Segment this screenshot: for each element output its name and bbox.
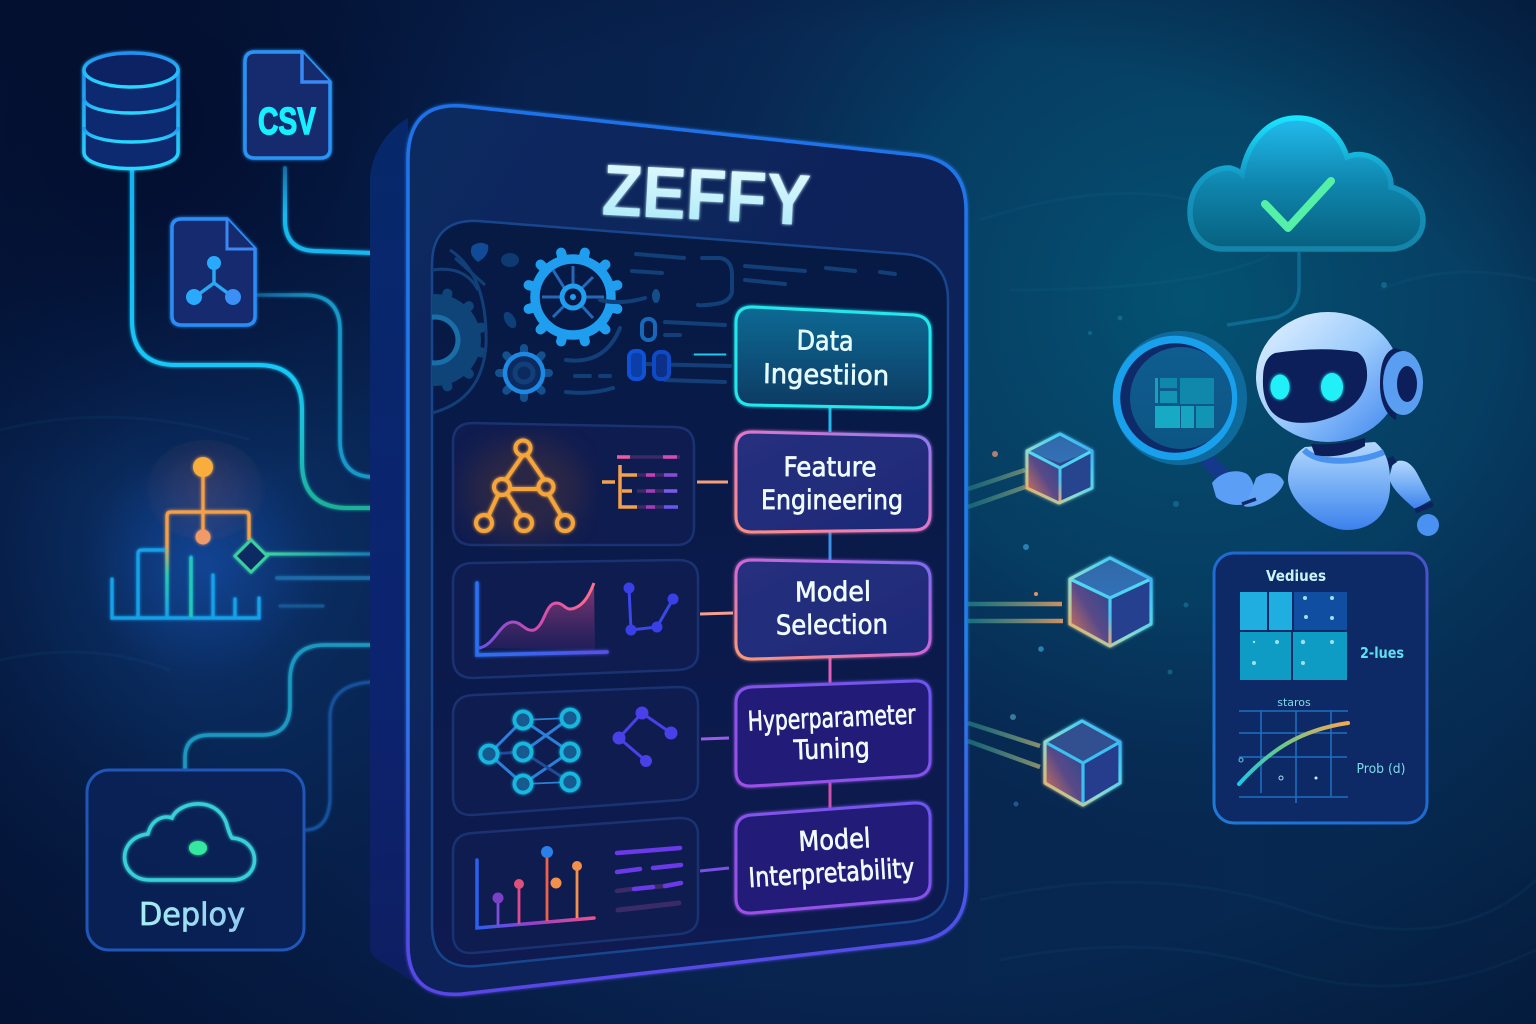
row: interpretability visuals [453,818,698,953]
icon: small gear [499,348,549,398]
area chart [479,583,595,650]
robot hand holding magnifier [1212,471,1254,505]
step: Hyperparameter Tuning: Tuning [792,733,870,766]
step: Feature Engineering: Engineering [761,485,903,516]
row: model selection visuals [453,560,698,678]
small graph [612,706,678,767]
icon: CSV file [245,52,330,158]
streams from panel to cubes [968,470,1063,767]
icon: deploy cloud [125,804,254,880]
line chart [1239,711,1348,803]
connector wires: data sources into panel [132,168,372,830]
robot neck [1311,438,1365,456]
chart: decision tree with bars [112,440,267,618]
neural network [480,710,578,792]
step: Model Interpretability: Interpretability [748,853,915,894]
connector: cloud to robot [1227,252,1299,325]
icon: database [84,53,178,168]
icon: graph file [172,219,255,325]
panel: ZEFFY main pipeline [370,106,966,994]
step: Data Ingestion: Ingestiion [763,359,889,392]
robot ear [1380,348,1402,420]
label: deploy: Deploy [139,897,245,933]
heatmap [1240,592,1347,680]
icon: main gear [529,253,617,341]
step: Model Interpretability: Model [798,823,871,858]
node chart [624,582,678,636]
step: Model Selection: Model [795,577,871,608]
heading: Vedues: Vediues [1266,567,1326,585]
icon: cube 1 [1027,434,1092,503]
lollipop chart [477,860,594,928]
vertical connectors between steps [828,408,832,815]
panel: deploy [87,770,304,950]
treemap in lens [1155,378,1214,428]
robot head [1256,312,1400,442]
row: hyperparameter visuals [453,687,698,815]
step: Data Ingestion: Data [796,326,854,357]
step: Model Selection [736,560,930,659]
icon: cube 2 [1070,558,1151,646]
step: Data Ingestion [736,307,930,408]
icon: magnifier [1113,331,1247,490]
icon: orange tree [476,440,573,531]
robot right arm [1389,461,1431,509]
robot body [1288,442,1390,530]
step: Model Selection: Selection [776,610,888,641]
icon: cube 3 [1045,721,1120,805]
gears illustration [389,243,895,413]
particles [992,282,1387,806]
icon: CSV file: CSV [258,101,316,143]
label: 2-lues: 2-lues [1360,644,1404,662]
step: Feature Engineering: Feature [784,452,876,483]
step: Model Interpretability [736,803,930,913]
step: Hyperparameter Tuning: Hyperparameter [747,699,917,738]
label: Prob (d): Prob (d) [1356,762,1406,777]
icon: cloud with check [1190,118,1423,249]
row: feature engineering visuals [453,423,694,545]
robot [1212,312,1439,536]
text bars [617,848,681,910]
mini table [602,457,680,507]
step: Hyperparameter Tuning [736,681,930,786]
inner panel [432,221,948,966]
faded pipeline marks [566,254,895,393]
title: ZEFFY: ZEFFY [600,151,812,241]
label: staros: staros [1277,696,1311,709]
panel: metrics [1214,553,1427,823]
step: Feature Engineering [736,432,930,532]
